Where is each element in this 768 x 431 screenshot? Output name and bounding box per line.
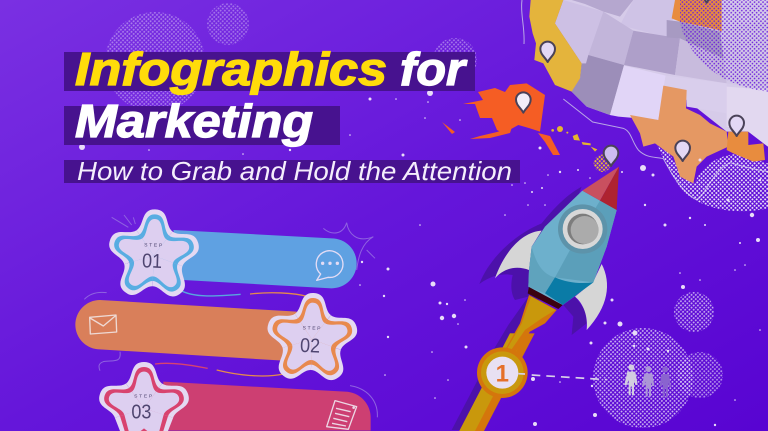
right fin shadow	[563, 297, 587, 335]
icon: speech bubble	[316, 251, 343, 280]
dashed connector	[518, 374, 607, 380]
Louisiana	[727, 132, 765, 162]
step 2 bar	[75, 300, 297, 361]
steps	[75, 208, 377, 431]
subtitle: How to Grab and Hold the Attention	[77, 156, 512, 186]
fins	[495, 231, 542, 278]
step 3 bar	[163, 382, 371, 431]
decorative sketch lines	[84, 215, 377, 417]
icon: envelope	[90, 315, 117, 334]
Alaska	[442, 83, 560, 155]
star: step 01: STEP	[144, 242, 164, 249]
title: Marketing: Marketing	[75, 95, 313, 147]
map pins	[516, 0, 744, 166]
trail	[459, 333, 535, 431]
nose cone	[582, 167, 619, 201]
states	[555, 0, 768, 147]
engine base	[528, 287, 563, 309]
halftone circles near people	[593, 292, 723, 428]
porthole	[558, 204, 607, 254]
star: step 02: STEP	[302, 325, 322, 332]
route line	[522, 0, 768, 200]
land base	[555, 0, 768, 147]
California	[529, 0, 582, 92]
star: step 01: 01	[142, 250, 163, 273]
flame	[505, 295, 557, 355]
northeast halftone	[680, 0, 768, 92]
title: for: for	[400, 43, 467, 95]
Mexico halftone	[657, 143, 768, 211]
northern orange state	[672, 0, 722, 32]
star: step 03	[94, 362, 194, 431]
Hawaii	[551, 126, 611, 172]
step marker 1: 1	[496, 360, 509, 387]
halftone circles behind title	[105, 3, 477, 112]
star: step 01	[102, 208, 205, 305]
step 1 bar	[173, 230, 357, 288]
rocket	[452, 167, 671, 431]
icon: document	[327, 401, 357, 429]
title: Infographics: Infographics	[75, 43, 387, 95]
connector curves	[155, 290, 308, 376]
star: step 02: 02	[300, 335, 320, 358]
title bars	[64, 52, 520, 183]
people icons	[624, 364, 671, 397]
star: step 02	[261, 291, 363, 389]
map of the United States	[442, 0, 768, 211]
paint splatter dots	[79, 90, 761, 426]
star: step 03: STEP	[134, 393, 154, 399]
step marker 1	[477, 347, 528, 398]
rocket shadow	[452, 187, 582, 430]
body	[528, 191, 617, 305]
star: step 03: 03	[131, 402, 151, 424]
Texas	[630, 86, 728, 183]
